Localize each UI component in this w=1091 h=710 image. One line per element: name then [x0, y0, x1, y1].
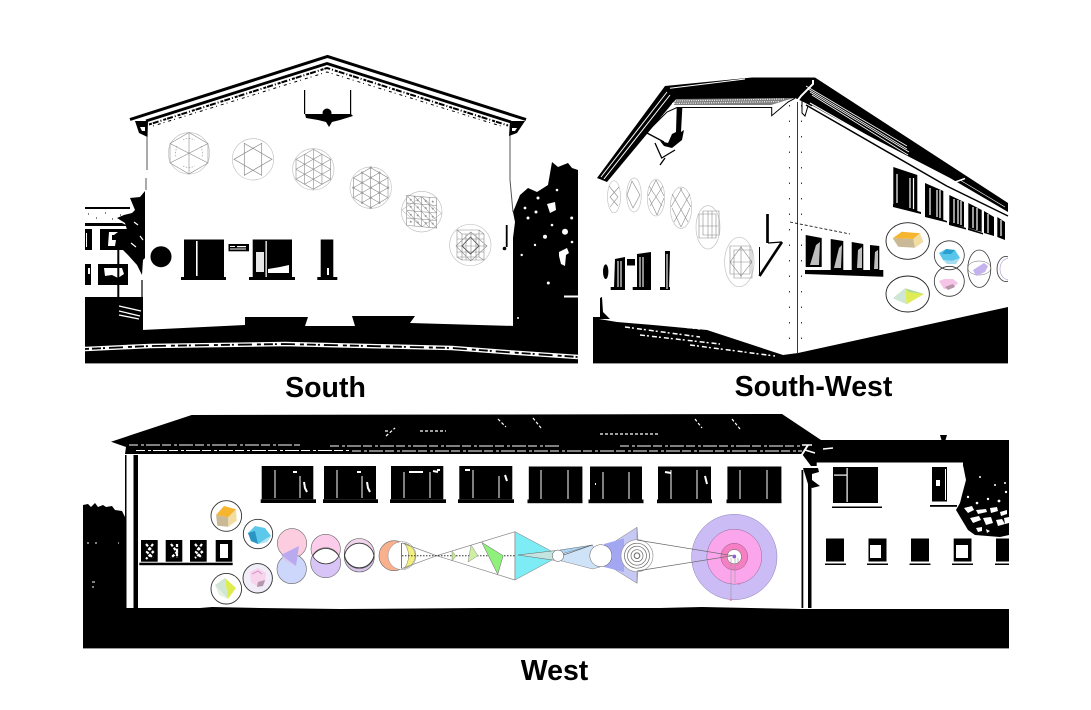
small green triangles	[452, 542, 503, 574]
corner drainpipes	[125, 455, 820, 608]
drainpipe end	[503, 247, 506, 250]
black circle	[150, 246, 172, 267]
mural: star of David	[232, 139, 274, 180]
left tree	[117, 191, 145, 275]
left wall step	[593, 297, 610, 319]
lower windows	[805, 235, 883, 277]
gable windows	[603, 251, 670, 290]
cyan inner triangle	[518, 550, 556, 560]
panel bottom edge	[85, 362, 578, 364]
small left windows	[139, 540, 233, 565]
ground	[593, 307, 1008, 364]
mural: hexagon with dashes	[168, 132, 210, 174]
basketball hoop	[304, 90, 353, 127]
panel: south-west facade	[593, 78, 1008, 364]
roof	[111, 414, 1009, 466]
road stripe	[85, 344, 578, 357]
indigo triangles	[590, 527, 638, 583]
right tree and ground	[513, 162, 578, 364]
window highlights	[196, 241, 329, 277]
mural: lattice cube	[401, 191, 442, 232]
right wall drainpipe	[506, 225, 508, 247]
roof	[597, 78, 1008, 216]
cube ellipse	[886, 223, 929, 259]
target circles	[692, 514, 777, 601]
tree dots	[87, 543, 119, 587]
tetrahedron ellipse	[968, 250, 991, 287]
octahedron ellipse	[886, 276, 929, 312]
lower window highlights	[810, 242, 878, 269]
tree highlights	[517, 189, 578, 319]
ground	[85, 316, 515, 364]
roof gable	[130, 56, 526, 137]
lines: ray triangles	[402, 532, 515, 580]
mural: nested squares	[450, 224, 491, 266]
wall edges	[146, 123, 513, 212]
left background building	[85, 207, 143, 330]
annex window highlights	[834, 468, 968, 558]
gable window highlights	[618, 254, 667, 289]
corner drainpipe	[790, 100, 808, 354]
panel: west facade	[83, 414, 1009, 648]
vesica circles	[311, 534, 341, 578]
cube	[211, 501, 242, 531]
mural: triangle grid	[292, 149, 335, 190]
upper windows	[893, 167, 1005, 240]
small window blank	[220, 544, 228, 558]
tree speckles	[964, 476, 1009, 533]
label: West: West	[521, 655, 589, 687]
upper window mullions	[275, 470, 767, 499]
polyhedron circles	[211, 501, 273, 604]
nearly coincident circles	[344, 538, 374, 572]
chimney	[940, 435, 947, 440]
right tree	[956, 440, 1009, 537]
cyan triangle	[515, 532, 560, 580]
left tree	[83, 503, 125, 608]
light blue band	[552, 545, 600, 569]
label: South-West: South-West	[735, 371, 893, 403]
octahedron	[211, 573, 242, 604]
dotted axis	[402, 555, 518, 557]
ground speckles	[625, 323, 775, 356]
upper window highlights	[897, 174, 1001, 236]
panel: south facade	[85, 56, 578, 364]
dodecahedron ellipse	[934, 266, 964, 296]
panel bottom edge	[593, 362, 1008, 364]
concentric circles	[621, 540, 653, 572]
converging rays	[637, 540, 733, 571]
upper windows	[261, 466, 782, 503]
wall base edge	[141, 280, 143, 329]
mural ellipses gable	[608, 178, 754, 287]
basketball hoop	[647, 108, 684, 165]
crescent orange	[379, 541, 416, 571]
icosahedron	[243, 519, 273, 549]
overlapping pink and blue circles	[277, 529, 307, 584]
ground	[83, 607, 1009, 648]
road stripe speckle	[85, 344, 578, 357]
label: South: South	[285, 372, 366, 404]
icosahedron ellipse	[934, 241, 964, 270]
dodecahedron	[243, 564, 272, 593]
polyhedron ellipses	[886, 223, 1008, 312]
side band	[790, 222, 850, 234]
drain arrow	[760, 214, 782, 276]
annex windows	[825, 467, 1009, 565]
mural: dotted triangle grid	[349, 167, 392, 208]
south windows	[181, 240, 337, 280]
panel bottom edge	[83, 648, 1009, 650]
small window patterns	[146, 544, 202, 559]
clipped sphere ellipse	[997, 256, 1008, 282]
left tree highlights	[131, 222, 143, 247]
